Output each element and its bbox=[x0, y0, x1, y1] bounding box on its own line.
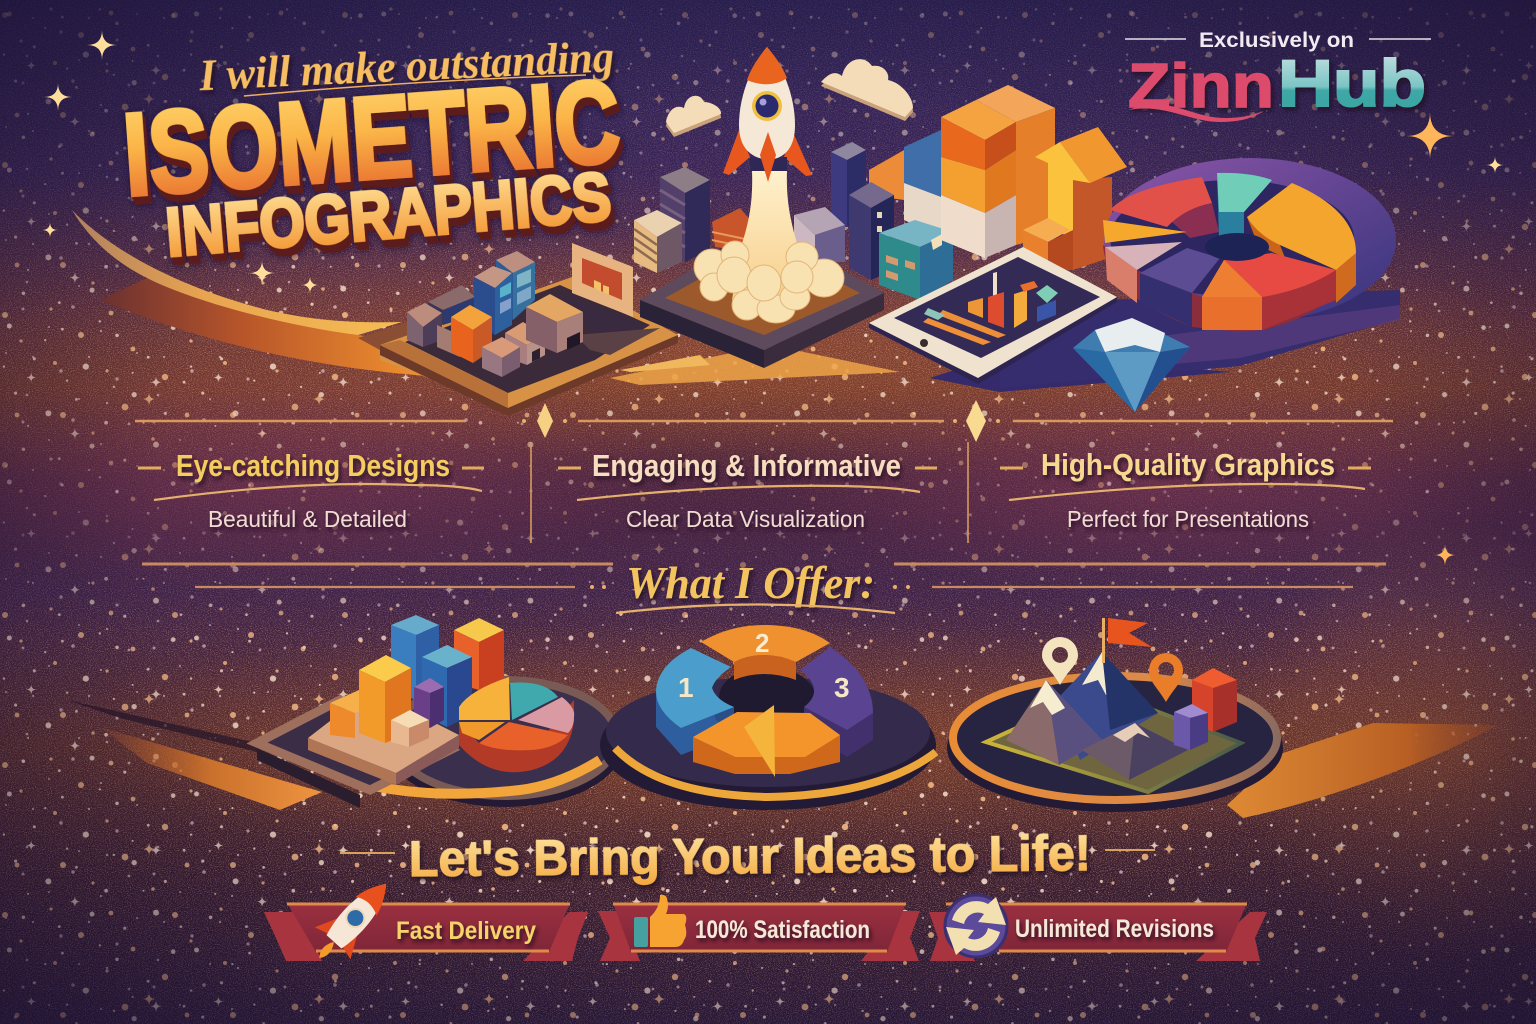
divider with diamonds bbox=[135, 400, 1393, 442]
rocket launch platform bbox=[640, 227, 884, 368]
mini pie bbox=[459, 677, 574, 772]
cycle segment 2: 2 bbox=[755, 628, 769, 658]
offer: charts platform bbox=[257, 615, 623, 808]
stacked blocks bbox=[941, 85, 1055, 258]
pie chart on purple disc bbox=[1000, 158, 1400, 388]
feature: engaging & informative: Clear Data Visualization bbox=[626, 506, 865, 532]
ribbon: fast delivery bbox=[264, 868, 588, 974]
left city platform bbox=[358, 243, 710, 416]
feature: eye-catching designs: Beautiful & Detailed bbox=[208, 506, 407, 532]
exhaust flame bbox=[732, 170, 806, 300]
logo: exclusively on ZinnHub: Hub bbox=[1278, 46, 1426, 120]
right platform base bbox=[947, 676, 1283, 812]
call to action: Let's Bring Your Ideas to Life! bbox=[409, 825, 1091, 887]
icon: rocket bbox=[301, 868, 404, 974]
swoosh bands bbox=[67, 210, 1527, 818]
what I offer heading: What I Offer: bbox=[626, 557, 875, 608]
ribbon: unlimited revisions bbox=[929, 895, 1267, 961]
icon: revision arrows bbox=[945, 895, 1007, 957]
logo: exclusively on ZinnHub: Zinn bbox=[1128, 52, 1274, 121]
center platform base bbox=[600, 667, 936, 810]
feature: engaging & informative: Engaging & Informative bbox=[592, 448, 901, 483]
map pin orange bbox=[1149, 653, 1183, 702]
rocket body bbox=[723, 130, 812, 176]
sparkles bbox=[42, 30, 1504, 566]
icon: thumbs up bbox=[634, 895, 686, 947]
blocks bbox=[428, 285, 475, 310]
cycle segment 1: 1 bbox=[678, 672, 694, 703]
flag bbox=[1102, 618, 1152, 663]
logo: exclusively on ZinnHub: Exclusively on bbox=[1199, 29, 1354, 52]
cycle segment 2 bbox=[701, 625, 830, 680]
tablet with chart bbox=[869, 247, 1117, 384]
feature: eye-catching designs: Eye-catching Designs bbox=[176, 448, 450, 483]
feature: high-quality graphics: High-Quality Graphics bbox=[1041, 447, 1335, 482]
title bbox=[120, 32, 624, 271]
mountains bbox=[1006, 652, 1188, 780]
isometric hero scene bbox=[358, 47, 1400, 416]
title script line: I will make outstanding bbox=[197, 32, 615, 100]
title INFOGRAPHICS: INFOGRAPHICS bbox=[163, 158, 614, 271]
growth arrow bbox=[1023, 127, 1127, 270]
clouds bbox=[666, 59, 913, 137]
cycle segment 1 bbox=[656, 648, 734, 755]
feature: engaging & informative bbox=[558, 448, 937, 532]
red block bbox=[1192, 668, 1237, 732]
offer: numbered cycle platform bbox=[600, 625, 936, 810]
pie slices bbox=[1172, 203, 1219, 238]
purple block bbox=[1174, 704, 1208, 750]
diamond bbox=[1073, 318, 1190, 412]
cycle segment 3: 3 bbox=[834, 672, 850, 703]
title ISOMETRIC: ISOMETRIC bbox=[120, 56, 624, 220]
map pin cream bbox=[1042, 637, 1078, 685]
rocket bbox=[694, 47, 844, 323]
ribbon: fast delivery: Fast Delivery bbox=[396, 917, 536, 945]
vertical dividers bbox=[531, 442, 968, 543]
cycle segment arrow bbox=[693, 705, 840, 777]
feature: eye-catching designs bbox=[138, 448, 484, 532]
feature: high-quality graphics: Perfect for Presentations bbox=[1067, 506, 1309, 532]
pie sides bbox=[1103, 245, 1356, 332]
ribbon: 100% satisfaction: 100% Satisfaction bbox=[695, 916, 870, 944]
laptop bbox=[572, 243, 633, 317]
city buildings bbox=[634, 130, 953, 300]
what I offer heading bbox=[142, 557, 1386, 613]
feature: high-quality graphics bbox=[1000, 447, 1371, 532]
logo: exclusively on ZinnHub bbox=[1125, 29, 1431, 122]
bar towers bbox=[330, 615, 504, 747]
cycle segment 3 bbox=[800, 647, 873, 757]
left platform base bbox=[257, 680, 623, 808]
map plate bbox=[986, 690, 1241, 792]
ribbon: unlimited revisions: Unlimited Revisions bbox=[1015, 915, 1214, 943]
ribbon: 100% satisfaction bbox=[598, 895, 920, 961]
smoke puffs bbox=[694, 241, 844, 323]
offer: mountain map platform bbox=[947, 618, 1283, 812]
